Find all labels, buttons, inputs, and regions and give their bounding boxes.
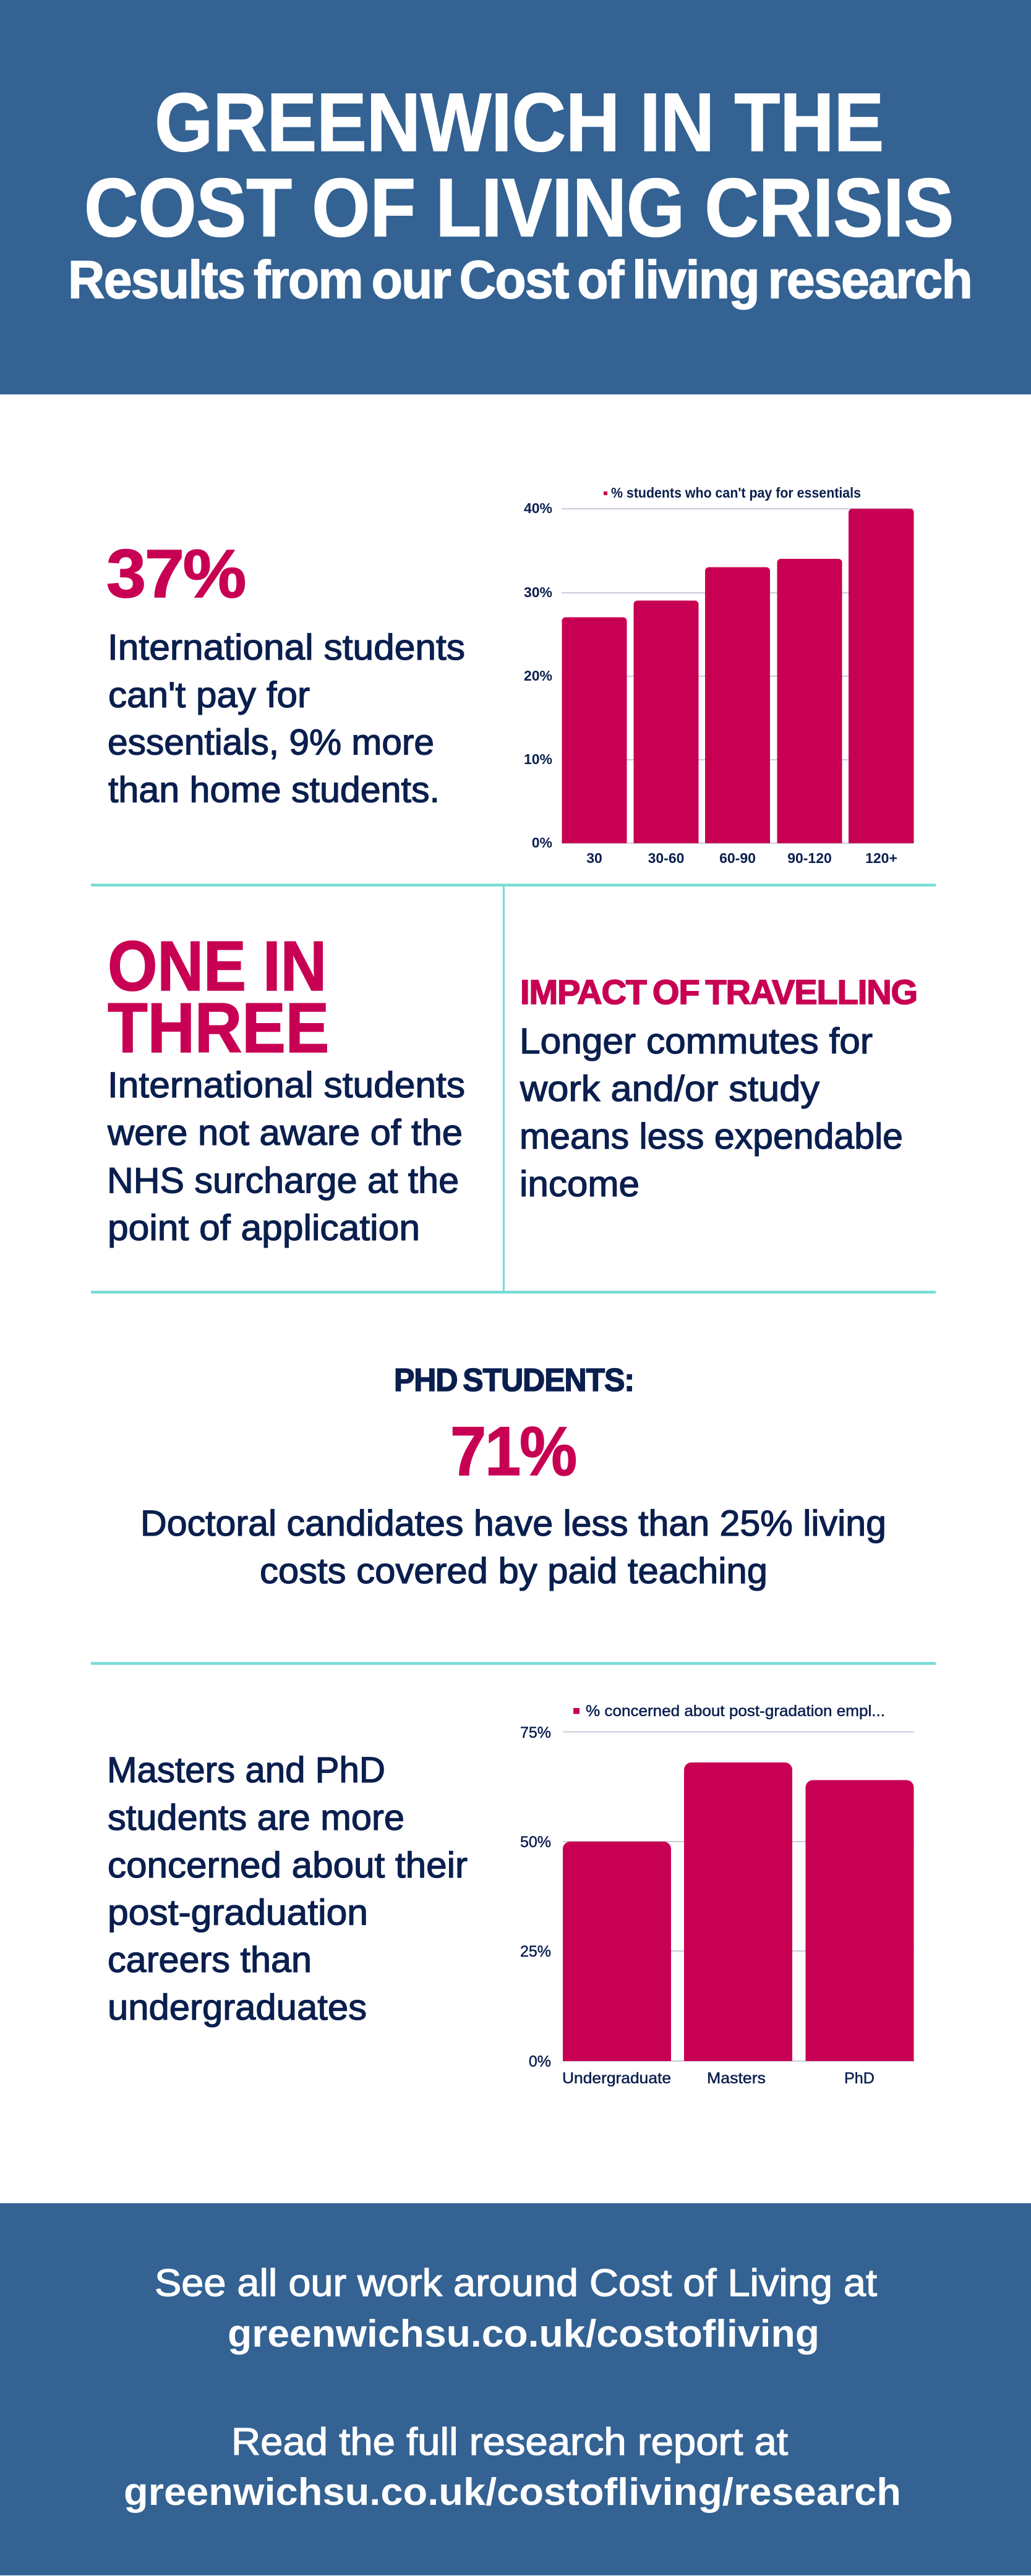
text: longer commutes: Longer commutes for <box>520 1021 873 1061</box>
y axis labels: 25% <box>520 1943 551 1960</box>
y axis labels: 10% <box>524 751 552 767</box>
text: NHS surcharge: were not aware of the <box>107 1113 463 1153</box>
link: cost of living: greenwichsu.co.uk/costofliving <box>228 2313 819 2355</box>
y axis labels: 75% <box>520 1724 551 1741</box>
y axis labels: 30% <box>524 584 552 600</box>
bar chart: students who can't pay for essentials by commute <box>524 485 914 866</box>
y axis labels <box>524 500 552 851</box>
text: see all our work: See all our work around Cost of Living at <box>155 2262 877 2305</box>
x axis labels: Masters <box>707 2070 766 2087</box>
text: longer commutes: income <box>520 1164 640 1204</box>
text: doctoral candidates <box>140 1503 886 1591</box>
text: NHS surcharge: point of application <box>108 1208 420 1248</box>
panel: impact of travelling <box>520 972 917 1204</box>
panel: post-graduation concern text: careers than <box>108 1940 312 1980</box>
text: international students essentials: International students <box>108 627 465 668</box>
text: doctoral candidates: costs covered by paid teaching <box>260 1551 768 1591</box>
panel: header banner <box>0 0 1031 394</box>
y axis labels: 20% <box>524 668 552 684</box>
panel: footer banner <box>0 2203 1031 2575</box>
panel: one in three <box>107 927 465 1248</box>
x axis labels: 90-120 <box>787 850 832 866</box>
y axis labels: 0% <box>532 835 552 851</box>
panel: post-graduation concern text: students are more <box>108 1798 404 1838</box>
big heading: one in three <box>108 927 329 1068</box>
heading: PhD students: PHD STUDENTS: <box>394 1362 634 1398</box>
text: international students essentials: than home students. <box>108 770 440 810</box>
text: international students essentials: can't pay for <box>108 675 310 715</box>
panel: international students stat <box>106 536 465 810</box>
text: read the report: Read the full research report at <box>231 2421 788 2463</box>
legend: % students who can't pay for essentials <box>611 485 861 501</box>
text: international students essentials <box>108 627 465 810</box>
y axis labels: 50% <box>520 1834 551 1851</box>
big heading: one in three: THREE <box>108 989 329 1068</box>
x axis labels: Undergraduate <box>562 2070 671 2087</box>
panel: post-graduation concern text <box>107 1750 468 2028</box>
big number: 37%: 37% <box>106 536 245 612</box>
subtitle: Results from our Cost of living research <box>68 250 972 310</box>
x axis labels: PhD <box>844 2070 875 2087</box>
title: COST OF LIVING CRISIS <box>84 162 954 254</box>
panel: post-graduation concern text: concerned about their <box>108 1845 468 1885</box>
text: longer commutes <box>520 1021 903 1204</box>
panel: post-graduation concern text: Masters and PhD <box>107 1750 385 1790</box>
y axis labels: 40% <box>524 500 552 516</box>
title: GREENWICH IN THE <box>155 77 884 169</box>
panel: post-graduation concern text: post-graduation <box>108 1893 368 1932</box>
text: NHS surcharge: International students <box>108 1065 465 1105</box>
bar chart: concerned about post-graduation employment <box>520 1702 914 2087</box>
heading: impact of travelling: IMPACT OF TRAVELLING <box>520 972 917 1011</box>
big heading: one in three: ONE IN <box>108 927 327 1006</box>
x axis labels <box>586 850 897 866</box>
text: longer commutes: means less expendable <box>520 1116 903 1157</box>
bars <box>562 509 914 843</box>
text: NHS surcharge: NHS surcharge at the <box>107 1161 459 1201</box>
x axis labels: 30-60 <box>648 850 684 866</box>
title <box>84 77 954 254</box>
text: longer commutes: work and/or study <box>520 1069 819 1109</box>
x axis labels: 120+ <box>865 850 897 866</box>
x axis labels <box>562 2070 875 2087</box>
big number: 71%: 71% <box>450 1413 576 1490</box>
text: NHS surcharge <box>107 1065 465 1248</box>
bars <box>563 1762 914 2061</box>
panel: post-graduation concern text: undergraduates <box>108 1987 367 2028</box>
text: international students essentials: essentials, 9% more <box>108 722 434 763</box>
legend: % concerned about post-gradation empl... <box>586 1702 885 1720</box>
panel: PhD students <box>140 1362 886 1591</box>
y axis labels: 0% <box>529 2053 551 2070</box>
text: doctoral candidates: Doctoral candidates have less than 25% living <box>140 1503 886 1544</box>
x axis labels: 30 <box>586 850 602 866</box>
y axis labels <box>520 1724 551 2070</box>
x axis labels: 60-90 <box>719 850 756 866</box>
link: research report: greenwichsu.co.uk/costofliving/research <box>124 2471 901 2514</box>
